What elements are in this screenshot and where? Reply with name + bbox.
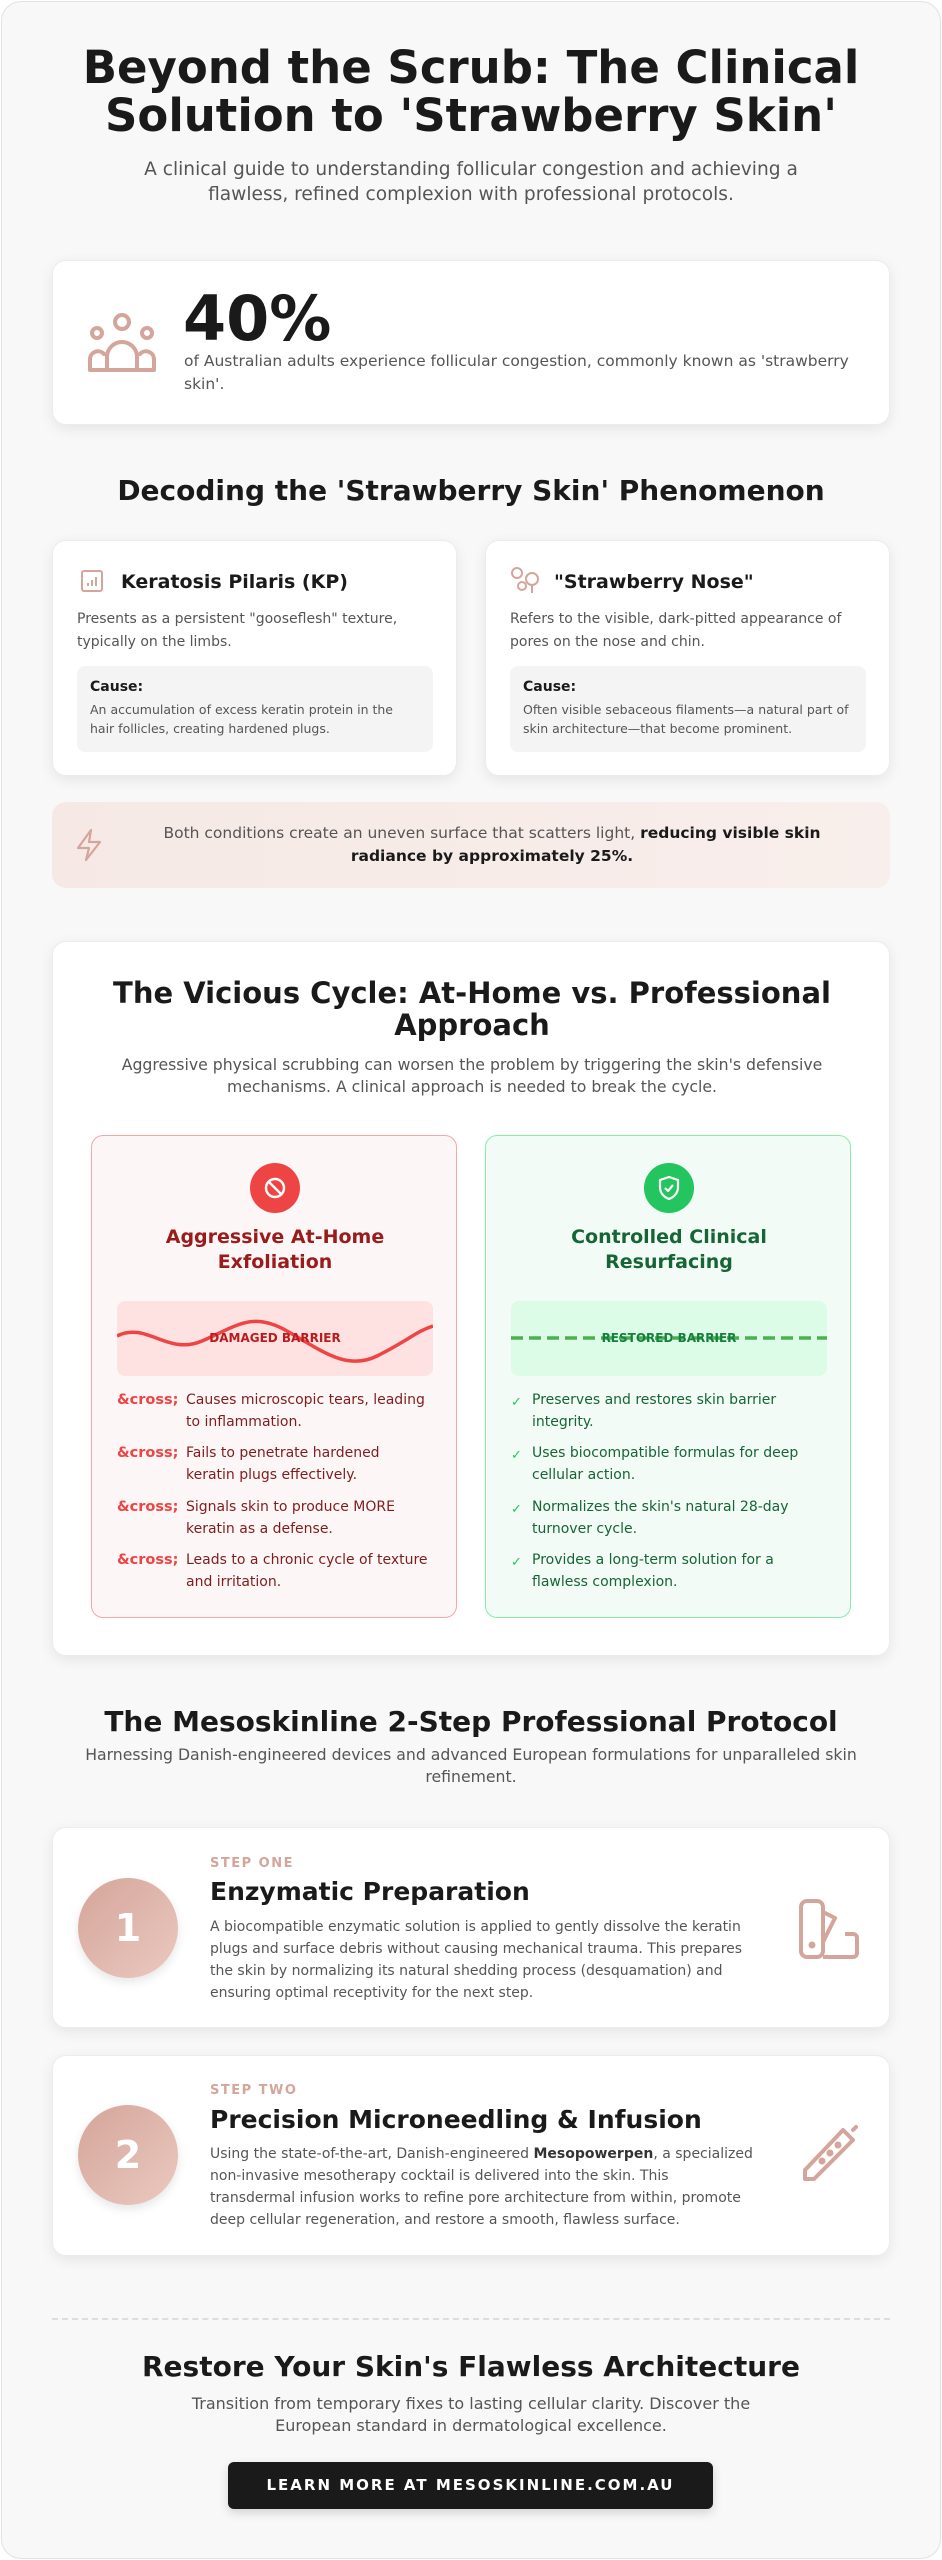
cycle heading: Approach bbox=[394, 1008, 550, 1042]
panel: at-home: Signals skin to produce MORE bbox=[186, 1499, 395, 1515]
panel: clinical: ✓ bbox=[511, 1555, 522, 1570]
step number circle: 1 bbox=[115, 1906, 141, 1950]
cause box bbox=[510, 666, 866, 752]
step description: Using the state-of-the-art, Danish-engineered Mesopowerpen, a specialized bbox=[210, 2146, 753, 2162]
cycle heading bbox=[113, 976, 831, 1042]
cta button: LEARN MORE AT MESOSKINLINE.COM.AU bbox=[266, 2476, 674, 2494]
step title: Precision Microneedling & Infusion bbox=[210, 2105, 702, 2134]
panel: clinical bbox=[485, 1135, 851, 1618]
step number circle bbox=[78, 1878, 178, 1978]
title bbox=[83, 41, 859, 142]
cta text bbox=[192, 2394, 750, 2435]
title: Solution to 'Strawberry Skin' bbox=[105, 89, 837, 142]
subtitle bbox=[144, 159, 798, 205]
step description: the skin by normalizing its natural shedding process (desquamation) and bbox=[210, 1963, 722, 1979]
callout text: Both conditions create an uneven surface that scatters light, reducing visible skin bbox=[163, 824, 821, 842]
panel: clinical: cellular action. bbox=[532, 1467, 635, 1483]
panel: clinical: flawless complexion. bbox=[532, 1574, 678, 1590]
panel: at-home: &cross; bbox=[117, 1392, 178, 1408]
callout text bbox=[163, 824, 821, 865]
watermark: MESOSKINLINE.COM.AU bbox=[139, 969, 789, 1633]
description bbox=[510, 611, 842, 650]
step description: plugs and surface debris without causing mechanical trauma. This prepares bbox=[210, 1941, 742, 1957]
list: positives bbox=[511, 1392, 798, 1590]
cycle heading: The Vicious Cycle: At-Home vs. Professional bbox=[113, 976, 831, 1010]
icon: users bbox=[88, 313, 156, 372]
diagram: damaged barrier: DAMAGED BARRIER bbox=[209, 1331, 341, 1345]
description: Presents as a persistent "gooseflesh" texture, bbox=[77, 611, 397, 627]
panel: clinical: ✓ bbox=[511, 1448, 522, 1463]
panel title: Keratosis Pilaris (KP) bbox=[121, 571, 348, 593]
description: Refers to the visible, dark-pitted appearance of bbox=[510, 611, 841, 627]
icon: pen bbox=[803, 2124, 858, 2181]
cycle subtitle: Aggressive physical scrubbing can worsen the problem by triggering the skin's defensive bbox=[122, 1055, 822, 1074]
panel: at-home: &cross; bbox=[117, 1445, 178, 1461]
step description: ensuring optimal receptivity for the next step. bbox=[210, 1985, 533, 2001]
panel: clinical: turnover cycle. bbox=[532, 1521, 637, 1537]
step description: non-invasive mesotherapy cocktail is delivered into the skin. This bbox=[210, 2168, 669, 2184]
cause box: Cause: bbox=[523, 679, 576, 695]
cta text: Transition from temporary fixes to lasting cellular clarity. Discover the bbox=[192, 2394, 750, 2413]
description: typically on the limbs. bbox=[77, 634, 232, 650]
list: negatives bbox=[117, 1392, 428, 1590]
panel: strawberry nose bbox=[485, 540, 890, 776]
description: pores on the nose and chin. bbox=[510, 634, 705, 650]
stat number: 40% bbox=[183, 282, 331, 355]
panel: clinical: Uses biocompatible formulas for deep bbox=[532, 1445, 798, 1461]
stat text: of Australian adults experience follicular congestion, commonly known as 'strawberry skin'. bbox=[184, 352, 849, 393]
panel title: "Strawberry Nose" bbox=[554, 571, 754, 593]
panel: at-home: keratin plugs effectively. bbox=[186, 1467, 357, 1483]
panel: clinical: integrity. bbox=[532, 1414, 594, 1430]
cta button bbox=[228, 2462, 713, 2509]
step label: STEP ONE bbox=[210, 1856, 294, 1871]
icon: shield bbox=[644, 1163, 694, 1213]
panel: vicious cycle bbox=[52, 941, 890, 1656]
heading: decoding: Decoding the 'Strawberry Skin' Phenomenon bbox=[117, 474, 825, 507]
protocol subtitle: refinement. bbox=[425, 1767, 517, 1786]
panel: at-home: &cross; bbox=[117, 1499, 178, 1515]
panel: at-home: &cross; bbox=[117, 1552, 178, 1568]
callout text: radiance by approximately 25%. bbox=[351, 847, 633, 865]
step description: A biocompatible enzymatic solution is applied to gently dissolve the keratin bbox=[210, 1919, 741, 1935]
panel title bbox=[571, 1226, 767, 1273]
callout: radiance bbox=[52, 802, 890, 888]
panel: at-home: to inflammation. bbox=[186, 1414, 302, 1430]
step number circle bbox=[78, 2105, 178, 2205]
panel: at-home: keratin as a defense. bbox=[186, 1521, 333, 1537]
panel: at-home: Causes microscopic tears, leading bbox=[186, 1392, 425, 1408]
subtitle: A clinical guide to understanding follicular congestion and achieving a bbox=[144, 159, 798, 180]
icon: chart bbox=[81, 570, 103, 592]
icon: swatch bbox=[799, 1899, 859, 1959]
title: Beyond the Scrub: The Clinical bbox=[83, 41, 859, 94]
step two card bbox=[52, 2055, 890, 2256]
cycle subtitle: mechanisms. A clinical approach is needed to break the cycle. bbox=[227, 1077, 717, 1096]
stat card bbox=[52, 260, 890, 425]
cause box: Cause: bbox=[90, 679, 143, 695]
step description bbox=[210, 1919, 742, 2001]
panel: clinical: Provides a long-term solution for a bbox=[532, 1552, 774, 1568]
icon: ban bbox=[250, 1163, 300, 1213]
diagram: restored barrier: RESTORED BARRIER bbox=[602, 1331, 736, 1345]
cause box bbox=[77, 666, 433, 752]
panel title: Controlled Clinical bbox=[571, 1226, 767, 1248]
step label: STEP TWO bbox=[210, 2083, 297, 2098]
step description bbox=[210, 2146, 753, 2228]
panel: at-home: Fails to penetrate hardened bbox=[186, 1445, 380, 1461]
step one card bbox=[52, 1827, 890, 2028]
panel title bbox=[166, 1226, 384, 1273]
panel title: Exfoliation bbox=[218, 1251, 332, 1273]
step title: Enzymatic Preparation bbox=[210, 1877, 530, 1906]
panel: at-home: Leads to a chronic cycle of texture bbox=[186, 1552, 428, 1568]
diagram: restored barrier bbox=[511, 1301, 827, 1376]
description bbox=[77, 611, 397, 650]
subtitle: flawless, refined complexion with professional protocols. bbox=[208, 184, 734, 205]
cause box: An accumulation of excess keratin protein in the bbox=[90, 702, 393, 717]
step description: deep cellular regeneration, and restore a smooth, flawless surface. bbox=[210, 2212, 680, 2228]
panel title: Aggressive At-Home bbox=[166, 1226, 384, 1248]
panel: clinical: ✓ bbox=[511, 1502, 522, 1517]
cta text: European standard in dermatological excellence. bbox=[275, 2416, 667, 2435]
panel: keratosis pilaris bbox=[52, 540, 457, 776]
cause box: hair follicles, creating hardened plugs. bbox=[90, 721, 330, 736]
protocol subtitle: Harnessing Danish-engineered devices and advanced European formulations for unparalleled skin bbox=[85, 1745, 857, 1764]
icon: cells bbox=[511, 567, 539, 593]
panel: clinical: Preserves and restores skin barrier bbox=[532, 1392, 776, 1408]
cause box: Often visible sebaceous filaments—a natural part of bbox=[523, 702, 849, 717]
protocol subtitle bbox=[85, 1745, 857, 1786]
diagram: damaged barrier bbox=[117, 1301, 433, 1376]
panel: at-home bbox=[91, 1135, 457, 1618]
panel title: Resurfacing bbox=[605, 1251, 733, 1273]
heading: cta: Restore Your Skin's Flawless Architecture bbox=[142, 2350, 800, 2383]
cycle subtitle bbox=[122, 1055, 822, 1096]
heading: protocol: The Mesoskinline 2-Step Professional Protocol bbox=[104, 1705, 838, 1738]
icon: lightning bbox=[76, 828, 102, 862]
panel: clinical: Normalizes the skin's natural 28-day bbox=[532, 1499, 789, 1515]
step description: transdermal infusion works to refine pore architecture from within, promote bbox=[210, 2190, 741, 2206]
panel: clinical: ✓ bbox=[511, 1395, 522, 1410]
panel: at-home: and irritation. bbox=[186, 1574, 281, 1590]
cause box: skin architecture—that become prominent. bbox=[523, 721, 792, 736]
step number circle: 2 bbox=[115, 2133, 141, 2177]
